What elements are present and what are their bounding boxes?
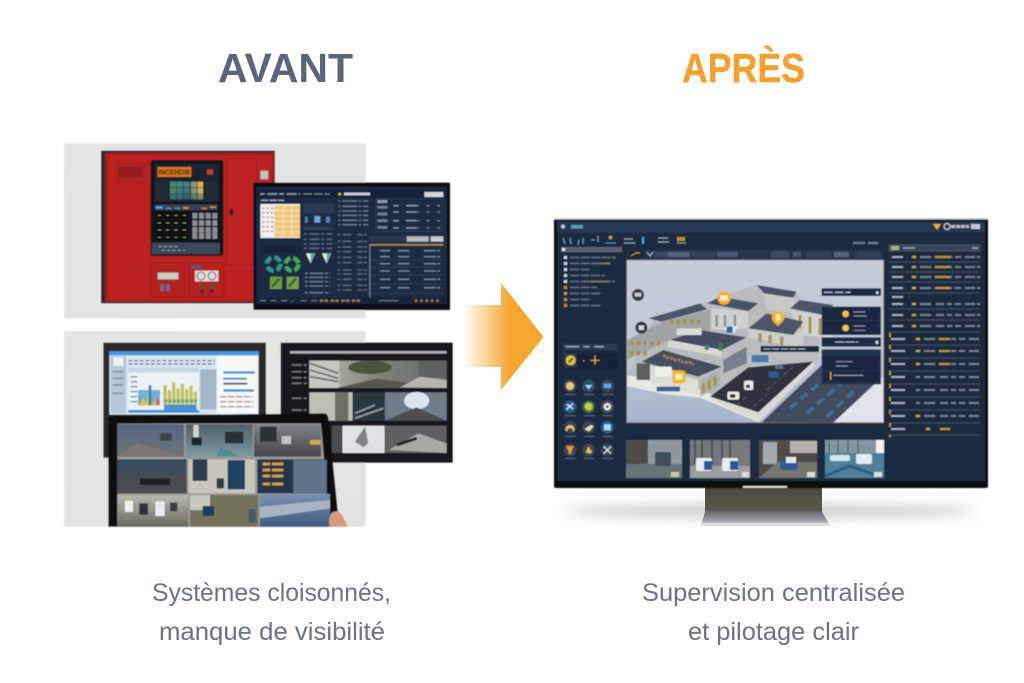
monitor	[554, 218, 988, 488]
thumbnail 4	[825, 440, 884, 478]
caption: avant	[152, 579, 391, 646]
building base	[627, 285, 820, 422]
shadow under monitor	[562, 505, 978, 517]
parked vehicles	[727, 365, 784, 400]
road	[762, 365, 875, 423]
popups	[761, 288, 881, 384]
bezel and screen	[554, 218, 988, 488]
photo: three screens on wall	[64, 331, 453, 527]
photo: fire alarm panel and dashboard monitor	[64, 143, 450, 318]
caption: après	[642, 579, 905, 646]
title: APRÈS: APRÈS	[682, 45, 805, 91]
wall background	[64, 331, 366, 527]
alarm display	[157, 167, 191, 177]
table widget	[260, 204, 300, 238]
rooftop equipment	[677, 328, 702, 335]
CCTV monitor	[281, 343, 453, 463]
parking	[710, 362, 813, 412]
caption: après: Supervision centralisée	[642, 579, 905, 607]
title: AVANT: AVANT	[218, 45, 353, 91]
toolbar icons	[563, 236, 878, 245]
caption: avant: Systèmes cloisonnés,	[152, 579, 391, 607]
hand holding tablet	[329, 511, 348, 527]
roofs	[648, 303, 707, 322]
gauge widget	[303, 203, 334, 213]
map pins	[632, 289, 784, 383]
tablet with camera grid	[108, 413, 339, 527]
caption: avant: manque de visibilité	[159, 618, 385, 646]
right data table	[889, 245, 980, 437]
chart panel	[369, 236, 443, 242]
caption: après: et pilotage clair	[688, 618, 859, 646]
3D building map	[627, 260, 884, 423]
wings and walls	[627, 310, 710, 360]
lower modules	[151, 263, 185, 297]
dashboard monitor	[253, 183, 450, 310]
fire alarm panel: INCENDIE	[158, 168, 190, 177]
fire alarm panel	[101, 151, 275, 303]
left sidebar list	[561, 247, 622, 306]
keypad housing	[151, 160, 223, 256]
donut widgets	[261, 246, 301, 252]
thumbnail 1	[626, 440, 682, 478]
thumbnail 3	[759, 440, 817, 478]
lists	[338, 201, 368, 225]
monitor stand	[701, 486, 830, 526]
thumbnail 2	[690, 440, 750, 478]
sidebar tabs and icons	[563, 343, 617, 458]
wall background	[64, 143, 366, 318]
camera thumbnails	[626, 440, 884, 478]
map toolbar	[628, 250, 882, 259]
arrow	[464, 283, 544, 390]
top bar	[557, 222, 985, 233]
PC monitor with charts	[103, 343, 266, 458]
